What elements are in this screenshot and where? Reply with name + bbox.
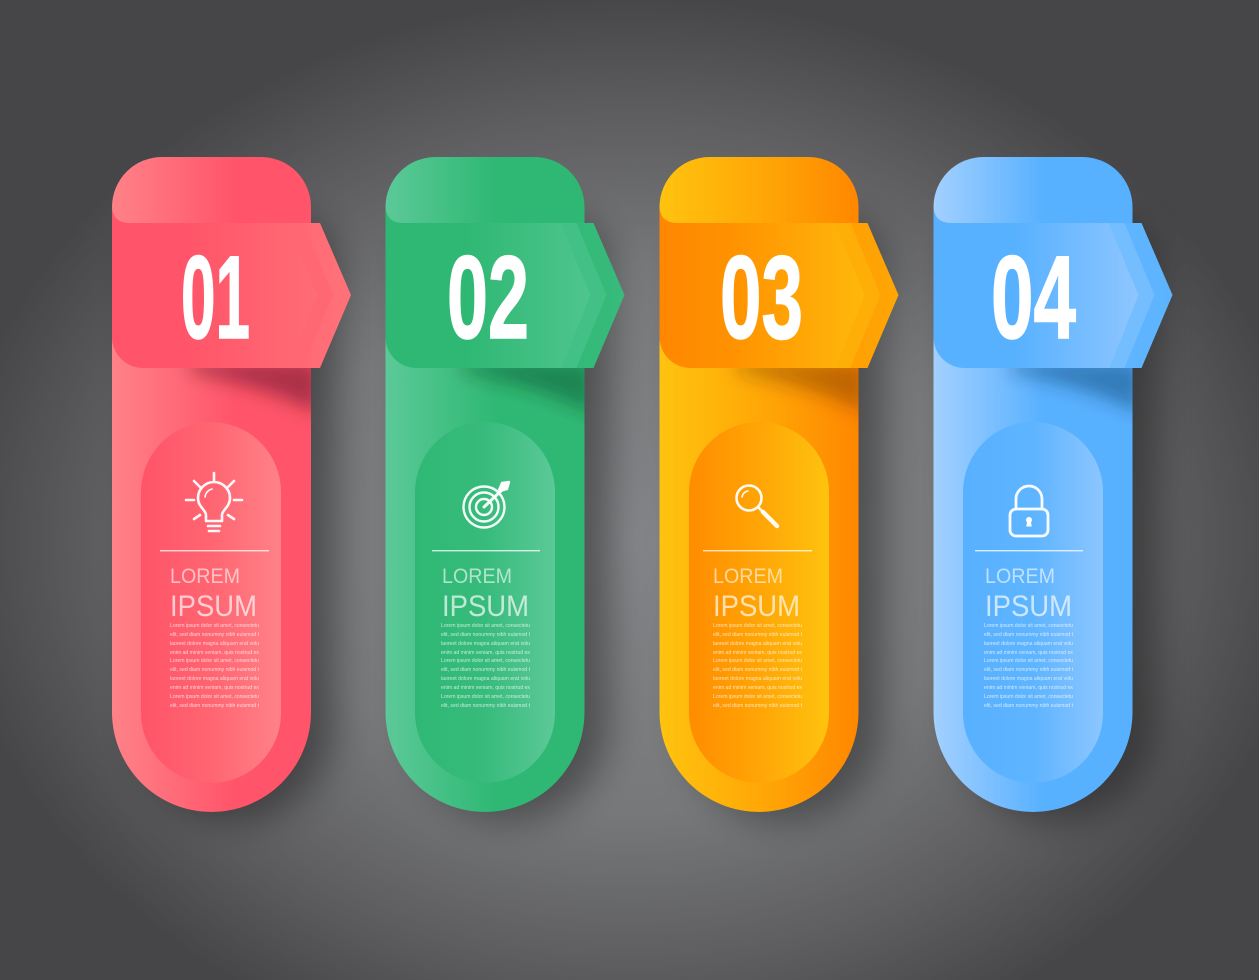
heading: lorem ipsum: IPSUM <box>713 590 800 623</box>
body text: elit, sed diam nonummy nibh euismod t <box>713 667 802 673</box>
number band <box>934 207 1138 368</box>
body text: enim ad minim veniam, quis nostrud ex <box>713 650 802 656</box>
body text: Lorem ipsum dolor sit amet, consectetu <box>984 623 1073 629</box>
band shadow <box>738 362 868 414</box>
card shadow <box>136 215 335 820</box>
arrow back layers <box>270 223 351 368</box>
icon: padlock <box>1010 486 1048 536</box>
card body <box>386 157 584 812</box>
card body <box>934 157 1132 812</box>
card body <box>112 157 311 812</box>
body text: laoreet dolore magna aliquam erat volu <box>713 641 802 647</box>
arrow back layers <box>1092 223 1172 368</box>
body text: laoreet dolore magna aliquam erat volu <box>713 676 802 682</box>
divider <box>975 550 1083 551</box>
divider <box>432 550 540 551</box>
body text: laoreet dolore magna aliquam erat volu <box>170 641 259 647</box>
body text: elit, sed diam nonummy nibh euismod t <box>441 667 530 673</box>
body text: elit, sed diam nonummy nibh euismod t <box>984 632 1073 638</box>
heading: lorem ipsum <box>442 565 529 623</box>
icon: target <box>464 482 509 528</box>
number band <box>660 207 864 368</box>
band shadow <box>190 362 320 414</box>
number: 04 <box>991 232 1076 364</box>
inner pill <box>141 422 281 783</box>
inner pill <box>689 422 829 783</box>
icon: magnifier <box>736 486 777 526</box>
body text: Lorem ipsum dolor sit amet, consectetu <box>984 694 1073 700</box>
divider <box>703 550 812 551</box>
body text: laoreet dolore magna aliquam erat volu <box>170 676 259 682</box>
body text: elit, sed diam nonummy nibh euismod t <box>170 632 259 638</box>
body text: Lorem ipsum dolor sit amet, consectetu <box>170 623 259 629</box>
body text: laoreet dolore magna aliquam erat volu <box>984 676 1073 682</box>
heading: lorem ipsum <box>985 565 1072 623</box>
card shadow <box>958 215 1157 820</box>
arrow back layers <box>818 223 898 368</box>
body text <box>170 623 259 709</box>
body text: Lorem ipsum dolor sit amet, consectetu <box>984 658 1073 664</box>
body text: Lorem ipsum dolor sit amet, consectetu <box>713 658 802 664</box>
heading: lorem ipsum: IPSUM <box>442 590 529 623</box>
body text: elit, sed diam nonummy nibh euismod t <box>713 632 802 638</box>
body text <box>984 623 1073 709</box>
heading: lorem ipsum: IPSUM <box>985 590 1072 623</box>
card body <box>660 157 858 812</box>
number: 01 <box>181 232 250 364</box>
body text: Lorem ipsum dolor sit amet, consectetu <box>441 658 530 664</box>
divider <box>160 550 269 551</box>
body text: Lorem ipsum dolor sit amet, consectetu <box>713 623 802 629</box>
heading: lorem ipsum: LOREM <box>442 565 512 588</box>
body text: enim ad minim veniam, quis nostrud ex <box>984 650 1073 656</box>
body text: laoreet dolore magna aliquam erat volu <box>441 676 530 682</box>
body text: elit, sed diam nonummy nibh euismod t <box>441 703 530 709</box>
body text: Lorem ipsum dolor sit amet, consectetu <box>170 694 259 700</box>
body text: enim ad minim veniam, quis nostrud ex <box>441 650 530 656</box>
body text: enim ad minim veniam, quis nostrud ex <box>170 685 259 691</box>
body text: Lorem ipsum dolor sit amet, consectetu <box>170 658 259 664</box>
heading: lorem ipsum <box>713 565 800 623</box>
band shadow <box>464 362 594 414</box>
band shadow <box>1012 362 1142 414</box>
number: 02 <box>447 232 529 364</box>
body text: laoreet dolore magna aliquam erat volu <box>984 641 1073 647</box>
icon: light bulb <box>186 473 242 531</box>
body text: Lorem ipsum dolor sit amet, consectetu <box>441 694 530 700</box>
body text: elit, sed diam nonummy nibh euismod t <box>170 703 259 709</box>
body text <box>713 623 802 709</box>
body text: enim ad minim veniam, quis nostrud ex <box>441 685 530 691</box>
body text: Lorem ipsum dolor sit amet, consectetu <box>441 623 530 629</box>
number band <box>386 207 590 368</box>
panel: step 01 <box>112 157 351 820</box>
body text: elit, sed diam nonummy nibh euismod t <box>713 703 802 709</box>
panel: step 03 <box>660 157 898 820</box>
body text: laoreet dolore magna aliquam erat volu <box>441 641 530 647</box>
heading: lorem ipsum: LOREM <box>170 565 240 588</box>
body text: enim ad minim veniam, quis nostrud ex <box>713 685 802 691</box>
arrow back layers <box>544 223 624 368</box>
body text: elit, sed diam nonummy nibh euismod t <box>170 667 259 673</box>
card shadow <box>684 215 883 820</box>
heading: lorem ipsum: IPSUM <box>170 590 257 623</box>
inner pill <box>415 422 555 783</box>
body text: enim ad minim veniam, quis nostrud ex <box>984 685 1073 691</box>
body text: enim ad minim veniam, quis nostrud ex <box>170 650 259 656</box>
body text: elit, sed diam nonummy nibh euismod t <box>441 632 530 638</box>
panel: step 04 <box>934 157 1172 820</box>
body text <box>441 623 530 709</box>
heading: lorem ipsum <box>170 565 257 623</box>
body text: elit, sed diam nonummy nibh euismod t <box>984 667 1073 673</box>
number band <box>112 207 317 368</box>
panel: step 02 <box>386 157 624 820</box>
heading: lorem ipsum: LOREM <box>985 565 1055 588</box>
inner pill <box>963 422 1103 783</box>
body text: Lorem ipsum dolor sit amet, consectetu <box>713 694 802 700</box>
card shadow <box>410 215 609 820</box>
body text: elit, sed diam nonummy nibh euismod t <box>984 703 1073 709</box>
number: 03 <box>720 232 803 364</box>
heading: lorem ipsum: LOREM <box>713 565 783 588</box>
